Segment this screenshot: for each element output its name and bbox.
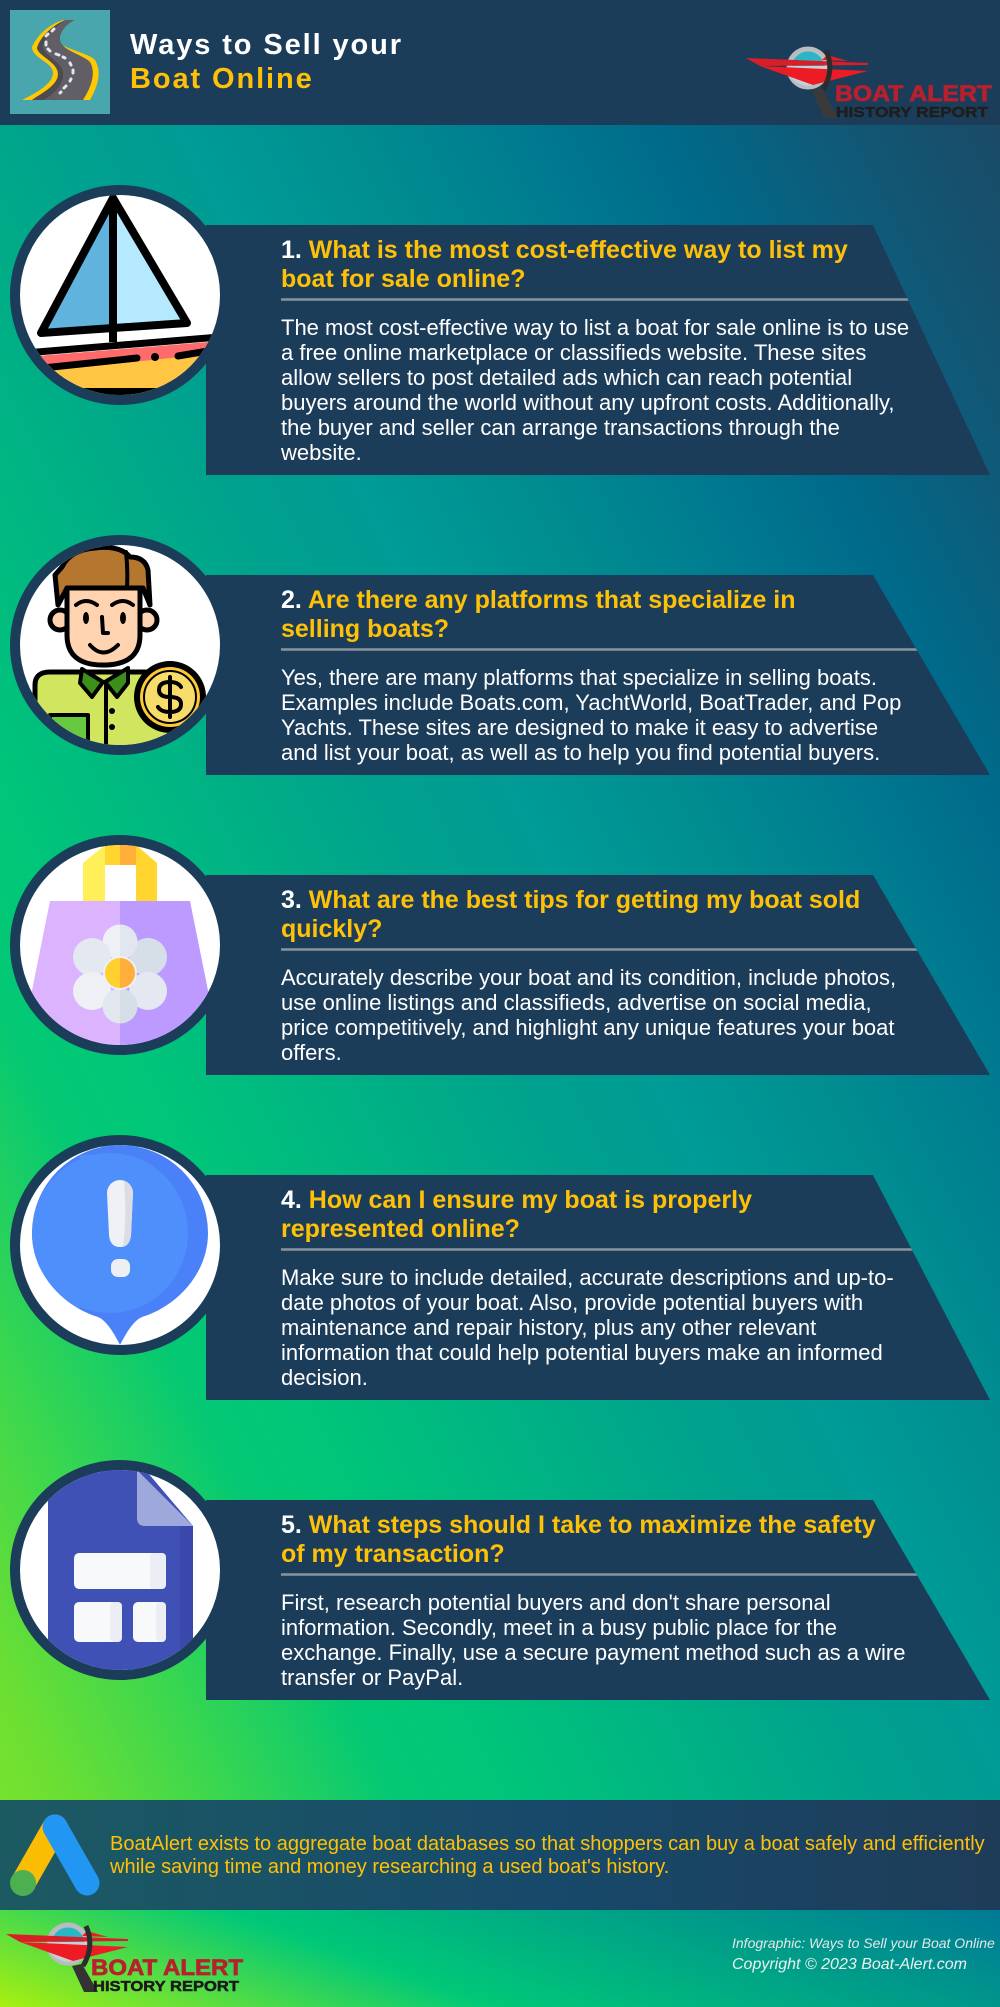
text: answer 3: price competitively, and highlight any unique features your boat (281, 1015, 895, 1040)
header bar (0, 0, 1000, 125)
text: answer 4: maintenance and repair history, plus any other relevant (281, 1315, 816, 1340)
logo: Boat Alert History Report (footer) (6, 1922, 244, 1995)
text: answer 4: information that could help potential buyers make an informed (281, 1340, 883, 1365)
heading: question 2: 2. Are there any platforms that specialize in (281, 586, 796, 614)
panel: question 1 (206, 225, 990, 475)
heading: question 1 (282, 240, 848, 287)
logo: Boat Alert History Report (footer): BOAT ALERT (91, 1955, 244, 1980)
text: answer 3 (281, 969, 894, 1060)
text: answer 5 (281, 1594, 904, 1690)
logo: Boat Alert History Report (footer): HISTORY REPORT (93, 1978, 239, 1995)
text: answer 5: exchange. Finally, use a secure payment method such as a wire (281, 1640, 905, 1665)
text: answer 2: and list your boat, as well as to help you find potential buyers. (281, 740, 880, 765)
heading: question 3: quickly? (281, 915, 382, 943)
icon: sailboat in circle (10, 185, 220, 405)
logo: Boat Alert History Report (header): BOAT ALERT (835, 81, 993, 106)
logo: Boat Alert History Report (header) (746, 46, 993, 121)
text: answer 1: website. (281, 440, 362, 465)
heading: question 5: of my transaction? (281, 1540, 505, 1568)
title: Ways to Sell your (130, 29, 403, 61)
text: about BoatAlert: while saving time and money researching a used boat's history. (110, 1856, 669, 1878)
text: answer 3: use online listings and classifieds, advertise on social media, (281, 990, 872, 1015)
icon: alert speech bubble in circle (10, 1135, 220, 1355)
text: answer 2 (282, 669, 900, 764)
heading: question 1: 1. What is the most cost-effective way to list my (281, 236, 848, 264)
icon: Google Ads style logo (10, 1814, 100, 1896)
heading: question 4 (281, 1190, 752, 1242)
icon: document form in circle (10, 1460, 220, 1680)
panel: question 3 (206, 875, 990, 1075)
text: about BoatAlert: BoatAlert exists to aggregate boat databases so that shoppers can buy a boat safely and efficiently (110, 1833, 985, 1855)
panel: question 2 (206, 575, 990, 775)
text: answer 4 (282, 1269, 893, 1385)
title (130, 29, 403, 95)
text: answer 2: Yes, there are many platforms that specialize in selling boats. (281, 665, 877, 690)
text: answer 1: a free online marketplace or classifieds website. These sites (281, 340, 866, 365)
text: answer 1: The most cost-effective way to list a boat for sale online is to use (281, 315, 909, 340)
logo: Boat Alert History Report (header): HISTORY REPORT (836, 104, 988, 121)
heading: question 2: selling boats? (281, 615, 449, 643)
footer background (0, 1910, 1000, 2007)
text: answer 1 (281, 319, 908, 460)
icon: salesman with coin in circle (10, 535, 220, 755)
heading: question 5 (282, 1515, 876, 1567)
heading: question 3: 3. What are the best tips for getting my boat sold (281, 886, 860, 914)
text: answer 1: buyers around the world without any upfront costs. Additionally, (281, 390, 894, 415)
heading: question 2 (282, 590, 794, 642)
text: answer 5: information. Secondly, meet in a busy public place for the (281, 1615, 837, 1640)
text: answer 2: Examples include Boats.com, YachtWorld, BoatTrader, and Pop (281, 690, 901, 715)
icon: winding road thumbnail (10, 10, 110, 114)
panel: question 5 (206, 1500, 990, 1700)
text: answer 5: First, research potential buyers and don't share personal (281, 1590, 831, 1615)
icon: flower bag in circle (10, 835, 220, 1055)
text: answer 4: decision. (281, 1365, 368, 1390)
heading: question 5: 5. What steps should I take to maximize the safety (281, 1511, 876, 1539)
heading: question 4: 4. How can I ensure my boat is properly (281, 1186, 752, 1214)
text: copyright: Copyright © 2023 Boat-Alert.com (732, 1956, 967, 1973)
text: answer 3: Accurately describe your boat and its condition, include photos, (281, 965, 896, 990)
text: answer 1: allow sellers to post detailed ads which can reach potential (281, 365, 852, 390)
text: infographic credit: Infographic: Ways to Sell your Boat Online (732, 1935, 995, 1951)
text: answer 3: offers. (281, 1040, 342, 1065)
text: answer 4: date photos of your boat. Also, provide potential buyers with (281, 1290, 863, 1315)
panel: question 4 (206, 1175, 990, 1400)
heading: question 3 (282, 890, 859, 942)
text: answer 1: the buyer and seller can arrange transactions through the (281, 415, 840, 440)
text: answer 4: Make sure to include detailed, accurate descriptions and up-to- (281, 1265, 894, 1290)
title: Boat Online (130, 63, 314, 95)
heading: question 4: represented online? (281, 1215, 520, 1243)
footer band (0, 1800, 1000, 1910)
heading: question 1: boat for sale online? (281, 265, 525, 293)
text: answer 5: transfer or PayPal. (281, 1665, 463, 1690)
text: about BoatAlert (110, 1833, 985, 1878)
text: answer 2: Yachts. These sites are designed to make it easy to advertise (281, 715, 878, 740)
